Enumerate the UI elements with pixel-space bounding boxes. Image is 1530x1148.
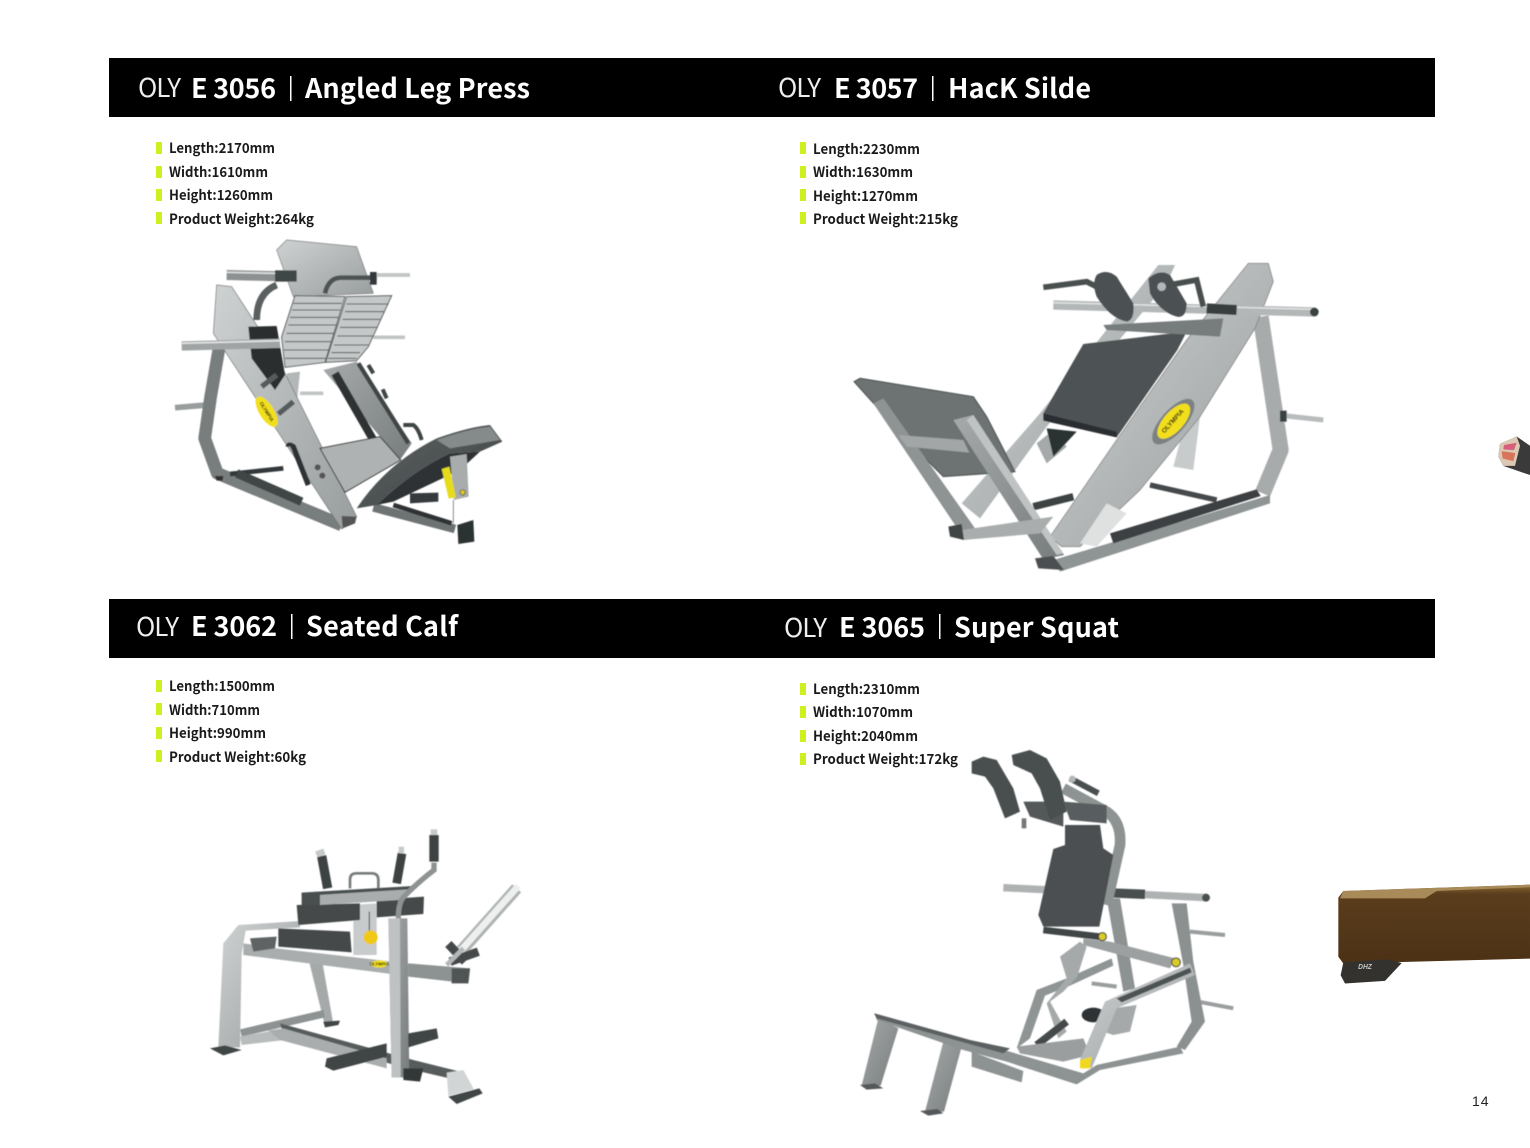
heading: E 3065 Super Squat: E 3065 [839,606,925,645]
specs: E 3062 [156,676,307,767]
specs: E 3057: Height:1270mm [813,186,918,206]
heading: E 3062 Seated Calf: E 3062 [191,605,277,644]
machine: super squat [860,750,1233,1116]
page number: 14 [1472,1093,1490,1109]
side crop: pink knob fragment [1498,437,1530,475]
specs: E 3062: Length:1500mm [169,676,275,696]
specs: E 3062: Height:990mm [169,723,266,743]
heading: E 3056 Angled Leg Press: OLY [138,68,181,105]
specs: E 3056: Length:2170mm [169,138,275,158]
logo: Olympia yellow badge [251,393,282,430]
heading: E 3062 Seated Calf [136,605,459,644]
specs: E 3056: Width:1610mm [169,162,268,182]
specs: E 3057: Width:1630mm [813,162,913,182]
logo: Olympia small badge: OLYMPIA [370,962,390,967]
heading: E 3057 Hack Slide [778,67,1091,106]
machine: hack slide [854,263,1323,572]
logo: Olympia badge [1145,392,1201,451]
specs: E 3062: Width:710mm [169,700,260,720]
specs: E 3057 [800,139,959,229]
heading: E 3057 Hack Slide: HacK Silde [948,67,1091,106]
specs: E 3057: Length:2230mm [813,139,920,159]
specs: E 3065: Height:2040mm [813,726,918,746]
heading: E 3057 Hack Slide: E 3057 [834,67,918,106]
specs: E 3065 [800,679,959,769]
logo: Olympia badge: OLYMPIA [1161,408,1186,435]
specs: E 3062: Product Weight:60kg [169,747,307,767]
heading: E 3062 Seated Calf: OLY [136,607,179,644]
specs: E 3065: Width:1070mm [813,702,913,722]
specs: E 3065: Product Weight:172kg [813,749,959,769]
logo: Olympia small badge [370,960,390,968]
machine: angled leg press [175,240,502,544]
specs: E 3057: Product Weight:215kg [813,209,959,229]
heading: E 3056 Angled Leg Press [138,67,530,106]
heading: E 3065 Super Squat: Super Squat [954,606,1119,645]
heading: E 3065 Super Squat [784,606,1119,645]
side crop: brown bench fragment [1338,885,1530,983]
specs: E 3056: Product Weight:264kg [169,209,315,229]
header bar: top row [109,58,1435,117]
header bar: bottom row [109,599,1435,658]
heading: E 3057 Hack Slide: OLY [778,68,821,105]
heading: E 3065 Super Squat: OLY [784,608,827,645]
logo: Olympia yellow badge: OLYMPIA [258,401,275,423]
side crop: brown bench fragment: DHZ [1358,964,1373,971]
specs: E 3056: Height:1260mm [169,185,273,205]
heading: E 3062 Seated Calf: Seated Calf [306,605,459,644]
specs: E 3065: Length:2310mm [813,679,920,699]
heading: E 3056 Angled Leg Press: E 3056 [191,67,276,106]
specs: E 3056 [156,138,315,229]
heading: E 3056 Angled Leg Press: Angled Leg Press [304,67,530,106]
machine: seated calf [210,829,518,1104]
